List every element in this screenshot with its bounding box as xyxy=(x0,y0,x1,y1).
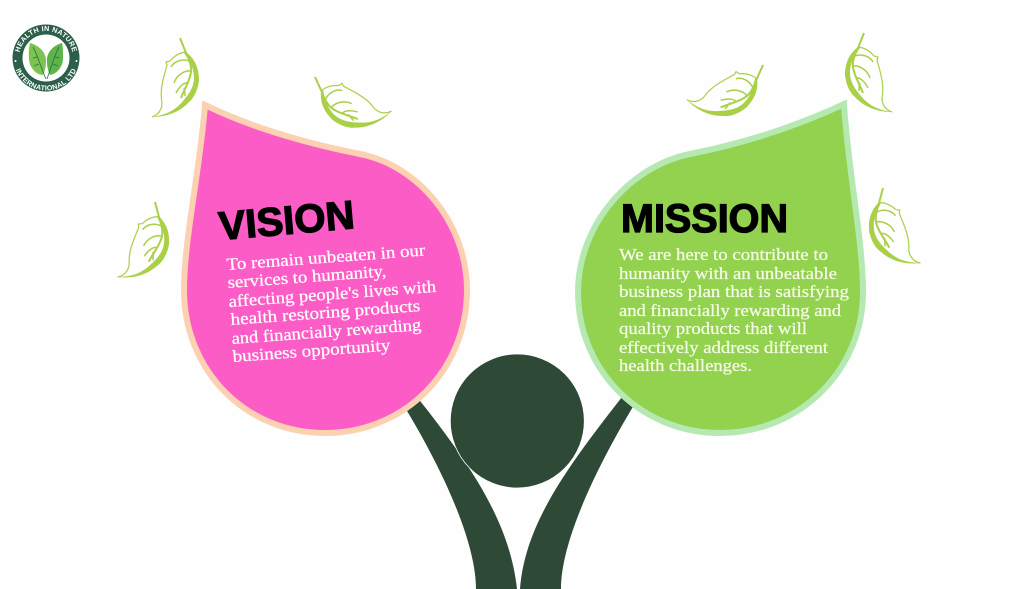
icon: leaf top right xyxy=(845,33,892,112)
text block: vision statement: health restoring products xyxy=(230,296,421,329)
logo: Health in Nature International Ltd: HEALTH IN NATURE xyxy=(14,26,78,52)
text block: mission statement: health challenges. xyxy=(619,356,752,375)
text block: mission statement: We are here to contribute to xyxy=(619,245,828,264)
text block: mission statement: humanity with an unbeatable xyxy=(619,264,837,283)
text block: vision statement: affecting people's lives with xyxy=(228,277,437,311)
text block: mission statement: quality products that will xyxy=(619,319,807,338)
text block: mission statement: business plan that is satisfying xyxy=(619,282,850,301)
icon: leaf lower left xyxy=(118,199,174,283)
text block: vision statement: and financially rewarding xyxy=(231,315,422,348)
icon: leaf lower right xyxy=(864,185,920,269)
heading: vision: VISION xyxy=(217,193,356,249)
figure: person holding up drops xyxy=(404,354,634,589)
icon: leaf middle left xyxy=(302,57,392,145)
text block: vision statement: business opportunity xyxy=(232,335,391,366)
text block: mission statement: effectively address different xyxy=(619,338,828,357)
text block: vision statement xyxy=(226,240,437,366)
logo: Health in Nature International Ltd xyxy=(12,24,80,92)
icon: leaf top left xyxy=(152,38,199,117)
text block: vision statement: To remain unbeaten in our xyxy=(226,240,426,274)
text block: vision statement: services to humanity, xyxy=(227,261,387,292)
icon: leaf middle right xyxy=(687,45,776,134)
text block: mission statement xyxy=(619,245,850,375)
text block: mission statement: and financially rewarding and xyxy=(619,301,842,320)
heading: mission: MISSION xyxy=(621,197,788,241)
panel: mission drop xyxy=(578,104,863,433)
logo: Health in Nature International Ltd: INTERNATIONAL LTD xyxy=(16,68,76,90)
panel: vision drop xyxy=(184,105,467,433)
